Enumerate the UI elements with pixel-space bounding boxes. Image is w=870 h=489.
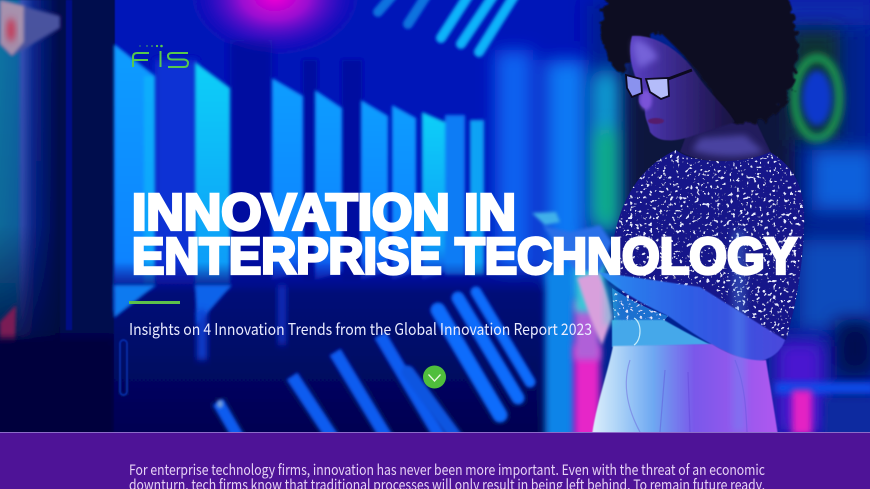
woman: sequin waist (612, 288, 668, 321)
woman: mouth (648, 118, 664, 124)
logo dots (139, 45, 163, 47)
FIS logo (133, 45, 188, 67)
woman: pale forearm (577, 272, 612, 345)
woman: nose highlight (640, 90, 652, 110)
title: INNOVATION IN (132, 184, 516, 240)
light streak overlay (604, 230, 746, 432)
woman: sequin top (610, 150, 804, 340)
purple intro band (0, 433, 870, 489)
server column cyan bars (114, 44, 484, 320)
woman: phone and hand (532, 212, 612, 272)
woman: forehead highlight (633, 40, 658, 68)
server column blues (155, 40, 362, 285)
scroll-down button (423, 366, 446, 388)
woman: belt buckle (634, 318, 640, 345)
woman: glasses (626, 70, 692, 99)
top diagonal light strips (378, 0, 514, 52)
woman: neck light (692, 135, 764, 156)
green rule (129, 301, 180, 304)
woman: belt (612, 320, 712, 347)
skirt side magenta and teal glow (545, 262, 605, 440)
woman: neck (680, 122, 771, 161)
soft far blue columns (495, 50, 590, 300)
woman: face (630, 36, 735, 140)
top magenta glow (190, 0, 360, 56)
woman (532, 0, 804, 435)
woman: bare arm (598, 272, 785, 362)
intro paragraph: For enterprise technology firms, innovation has never been more important. Even with the threat of an economic (129, 459, 765, 480)
lower dark floor with diagonal strips (114, 262, 554, 440)
logo wordmark (133, 51, 188, 67)
woman: hair (602, 0, 797, 124)
title (132, 184, 797, 284)
subtitle: Insights on 4 Innovation Trends from the Global Innovation Report 2023 (129, 316, 592, 340)
purple divider line (0, 432, 870, 433)
title: ENTERPRISE TECHNOLOGY (132, 228, 797, 284)
woman: trousers (592, 344, 778, 435)
intro paragraph (129, 459, 765, 489)
left dark door panel (0, 0, 115, 438)
right blurred lights (590, 0, 870, 438)
woman: trouser pleats (626, 360, 747, 432)
